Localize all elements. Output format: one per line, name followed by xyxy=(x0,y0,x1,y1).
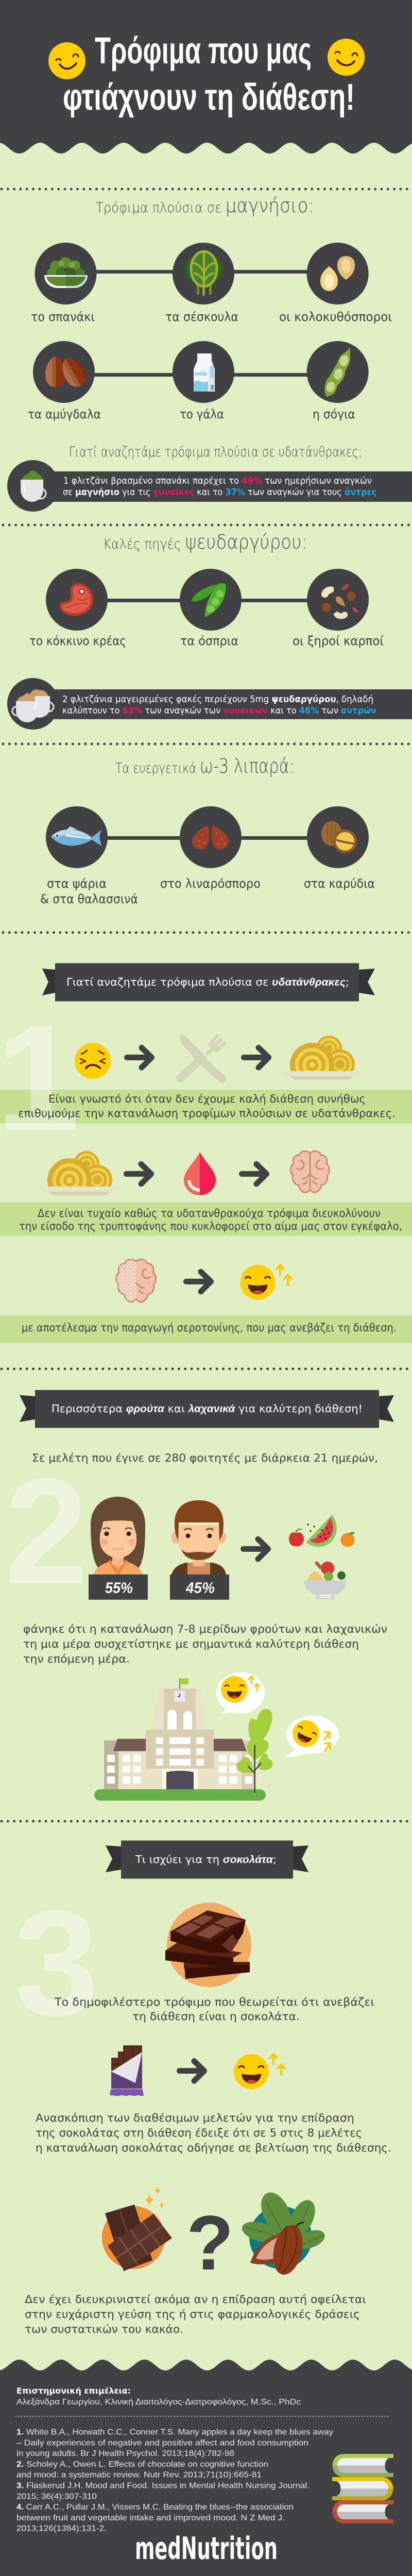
text: chocolate review: η κατανάλωση σοκολάτας οδήγησε σε βελτίωση της διάθεσης. xyxy=(36,2142,391,2154)
icon: happy face with arrows xyxy=(234,2054,285,2089)
text: references: in young adults. Br J Health Psychol. 2013;18(4):782-98 xyxy=(16,2449,234,2458)
labels: omega-3 foods xyxy=(40,876,375,906)
icon: milk carton: milk xyxy=(195,370,208,377)
speech bubble: happy 2 xyxy=(285,1716,339,1757)
text: chocolate review xyxy=(36,2112,391,2154)
callout: spinach cup xyxy=(7,460,412,512)
icon: stack of books xyxy=(332,2454,393,2523)
text: carbs craving: επιθυμούμε την κατανάλωση τροφίμων πλούσιων σε υδατάνθρακες. xyxy=(18,1107,396,1120)
arrow xyxy=(242,1164,267,1184)
big number 2: 2 xyxy=(5,1447,88,1615)
arrow xyxy=(243,1539,268,1559)
icon: fruits xyxy=(289,1515,355,1547)
icon: tree xyxy=(236,1709,273,1792)
text: references: 3. Flaskerud J.H. Mood and Food. Issues in Mental Health Nursing Journal. xyxy=(16,2481,310,2490)
labels: magnesium row 1 xyxy=(31,310,392,324)
labels: magnesium row 2: τα αμύγδαλα xyxy=(28,407,101,421)
arrow xyxy=(127,1164,151,1184)
text: study result xyxy=(23,1623,387,1665)
text: references: 2013;126(1384):131-2. xyxy=(16,2524,107,2533)
text: chocolate intro xyxy=(54,1996,374,2023)
text: chocolate review: της σοκολάτας στη διάθεση έδειξε ότι σε 5 στις 8 μελέτες xyxy=(36,2127,362,2139)
labels: magnesium row 1: οι κολοκυθόσποροι xyxy=(279,310,392,324)
text: references: between fruit and vegetable intake and improved mood. N Z Med J. xyxy=(16,2514,285,2522)
text: references: 2015; 36(4):307-310 xyxy=(16,2492,97,2501)
icon: spinach bowl xyxy=(35,243,97,304)
icon: sad face xyxy=(75,1043,111,1079)
icon: red meat xyxy=(46,569,108,631)
arrow xyxy=(179,2061,204,2081)
icon: smiling face right xyxy=(328,39,365,76)
icon: mixed nuts xyxy=(307,569,369,631)
text: references: – Daily experiences of negative and positive affect and food consumption xyxy=(16,2438,308,2447)
labels: zinc foods: το κόκκινο κρέας xyxy=(29,634,126,648)
label: 55 percent: 55% xyxy=(105,1580,133,1597)
icon: milk carton xyxy=(173,341,234,403)
text: references: 1. White B.A., Horwath C.C., Conner T.S. Many apples a day keep the blues away xyxy=(16,2428,333,2437)
panel: zinc foods xyxy=(46,569,369,631)
text: carbs craving xyxy=(18,1093,396,1120)
text: study result: την επόμενη μέρα. xyxy=(23,1653,130,1665)
band: carbs text 2 xyxy=(0,1202,412,1236)
icon: smiling face left xyxy=(48,42,85,79)
label: 45 percent xyxy=(170,1574,229,1600)
labels: magnesium row 1: το σπανάκι xyxy=(31,310,95,324)
speech bubble: happy 1 xyxy=(216,1672,265,1714)
icon: cup of spinach xyxy=(21,471,46,502)
icon: brain with serotonin xyxy=(116,1260,156,1302)
icon: knife and fork xyxy=(180,1033,227,1079)
icon: pasta plate 2 xyxy=(39,1151,118,1202)
panel: omega-3 foods xyxy=(46,806,369,868)
heading: zinc sources: Καλές πηγές ψευδαργύρου: xyxy=(103,531,307,553)
text: study result: φάνηκε ότι η κατανάλωση 7-8 μερίδων φρούτων και λαχανικών xyxy=(23,1623,387,1635)
icon: chocolate bars with sparkles xyxy=(101,2184,172,2271)
text: references: 4. Carr A.C., Pullar J.M., Vissers M.C. Beating the blues--the association xyxy=(16,2503,294,2512)
band: carbs text 1 background xyxy=(0,1090,412,1124)
text: unresolved question: των συστατικών του κακάο. xyxy=(25,2323,183,2335)
text: spinach fact: 1 φλιτζάνι βρασμένο σπανάκι παρέχει το 49% των ημερήσιων αναγκών xyxy=(63,476,372,486)
icon: question mark: ? xyxy=(186,2199,234,2286)
labels: magnesium row 2: το γάλα xyxy=(180,407,224,421)
labels: magnesium row 2 xyxy=(28,407,355,421)
labels: omega-3 foods: στο λιναρόσπορο xyxy=(160,876,261,891)
header panel with wavy edge xyxy=(0,0,412,154)
text: scientific editor: Επιστημονική επιμέλεια: xyxy=(16,2386,131,2396)
icon: wrapped chocolate bar xyxy=(110,2045,144,2096)
labels: zinc foods: τα όσπρια xyxy=(180,634,238,648)
icon: soybean pod xyxy=(307,341,369,403)
icon: pasta plate xyxy=(282,1036,361,1087)
text: spinach fact xyxy=(63,476,376,498)
band: carbs text 3 xyxy=(0,1315,412,1343)
labels: omega-3 foods: στα ψάρια xyxy=(47,876,107,891)
banner: why carbs xyxy=(42,963,375,1002)
logo: medNutrition: medNutrition xyxy=(135,2531,278,2567)
title: Τρόφιμα που μας xyxy=(95,30,312,72)
text: spinach fact: σε μαγνήσιο για τις γυναίκες και το 37% των αναγκών για τους άντρες xyxy=(63,487,376,498)
text: chocolate review: Ανασκόπιση των διαθέσιμων μελετών για την επίδραση xyxy=(36,2112,354,2124)
text: unresolved question: Δεν έχει διευκρινιστεί ακόμα αν η επίδραση αυτή οφείλεται xyxy=(25,2293,366,2306)
labels: zinc foods: οι ξηροί καρποί xyxy=(293,634,384,648)
arrow xyxy=(186,1272,211,1292)
icon: chard xyxy=(173,243,234,304)
icon: blood drop xyxy=(184,1152,216,1195)
text: unresolved question xyxy=(25,2293,366,2335)
icon: peas xyxy=(180,569,242,631)
text: study intro: Σε μελέτη που έγινε σε 280 φοιτητές με διάρκεια 21 ημερών, xyxy=(32,1452,378,1464)
labels: magnesium row 2: η σόγια xyxy=(313,407,355,421)
text: lentils fact: καλύπτουν το 63% των αναγκών των γυναικών και το 46% των αντρών xyxy=(62,705,376,716)
text: references xyxy=(16,2428,333,2533)
banner: fruits and vegetables: Περισσότερα φρούτα και λαχανικά για καλύτερη διάθεση! xyxy=(52,1402,363,1415)
icon: flaxseed xyxy=(180,806,242,868)
icon: two cups of lentils xyxy=(12,689,54,722)
text: scientific editor xyxy=(16,2386,301,2406)
text: scientific editor: Αλεξάνδρα Γεωργίου, Κλινική Διαιτολόγος-Διατροφολόγος, M.Sc., PhDc xyxy=(16,2398,301,2406)
icon: walnut xyxy=(307,806,369,868)
icon: cocoa pods and leaves xyxy=(240,2188,328,2278)
panel: magnesium foods row 1 xyxy=(35,243,369,304)
icon: man student xyxy=(171,1500,226,1574)
labels: zinc foods xyxy=(29,634,384,648)
label: 45 percent: 45% xyxy=(185,1580,215,1597)
text: unresolved question: στην ευχάριστη γεύση της ή στις φαρμακολογικές δράσεις xyxy=(25,2308,360,2320)
banner: chocolate xyxy=(106,1840,308,1878)
banner: why carbs: Γιατί αναζητάμε τρόφιμα πλούσια σε υδατάνθρακες ; xyxy=(66,976,349,988)
text: chocolate intro: τη διάθεση είναι η σοκολάτα. xyxy=(132,2010,300,2023)
icon: chocolate stack xyxy=(165,1903,251,1987)
text: references: and mood: a systematic review. Nutr Rev. 2013;71(10):665-81 xyxy=(16,2471,262,2480)
footer panel with wavy edge xyxy=(0,2360,412,2576)
arrow xyxy=(127,1048,151,1067)
labels: omega-3 foods: στα καρύδια xyxy=(304,876,375,891)
heading: omega-3: Τα ευεργετικά ω-3 λιπαρά: xyxy=(115,755,295,777)
icon: happy face with arrows xyxy=(240,1265,292,1300)
arrow xyxy=(244,1048,269,1067)
text: chocolate intro: Το δημοφιλέστερο τρόφιμο που θεωρείται ότι ανεβάζει xyxy=(54,1996,374,2008)
icon: university building xyxy=(94,1678,266,1801)
icon: fish xyxy=(46,806,108,868)
icon: salad bowl xyxy=(304,1562,346,1599)
heading: magnesium foods: Τρόφιμα πλούσια σε μαγνήσιο: xyxy=(96,194,314,217)
labels: omega-3 foods: & στα θαλασσινά xyxy=(40,892,138,906)
icon: almonds xyxy=(33,341,95,403)
text: references: 2. Scholey A., Owen L. Effects of chocolate on cognitive function xyxy=(16,2460,268,2469)
text: carbs craving: Είναι γνωστό ότι όταν δεν έχουμε καλή διάθεση συνήθως xyxy=(48,1093,366,1105)
label: 55 percent xyxy=(89,1574,148,1600)
text: lentils fact xyxy=(62,694,376,716)
icon: pumpkin seeds xyxy=(307,243,369,304)
callout: lentils cups xyxy=(7,678,412,730)
icon: brain xyxy=(291,1151,329,1192)
icon: woman student xyxy=(91,1497,145,1574)
panel: magnesium foods row 2 xyxy=(33,341,369,403)
big number 3: 3 xyxy=(14,1879,99,2047)
text: study result: τη μια μέρα συσχετίστηκε με σημαντικά καλύτερη διάθεση xyxy=(23,1638,359,1650)
title xyxy=(63,30,355,118)
banner: fruits and vegetables xyxy=(20,1390,394,1428)
labels: magnesium row 1: τα σέσκουλα xyxy=(165,310,238,324)
text: lentils fact: 2 φλιτζάνια μαγειρεμένες φακές περιέχουν 5mg ψευδαργύρου, δηλαδή xyxy=(62,694,373,705)
band: carbs text 2: Δεν είναι τυχαίο καθώς τα υδατανθρακούχα τρόφιμα διευκολύνουν xyxy=(38,1207,381,1219)
banner: chocolate: Τι ισχύει για τη σοκολάτα; xyxy=(135,1853,277,1866)
